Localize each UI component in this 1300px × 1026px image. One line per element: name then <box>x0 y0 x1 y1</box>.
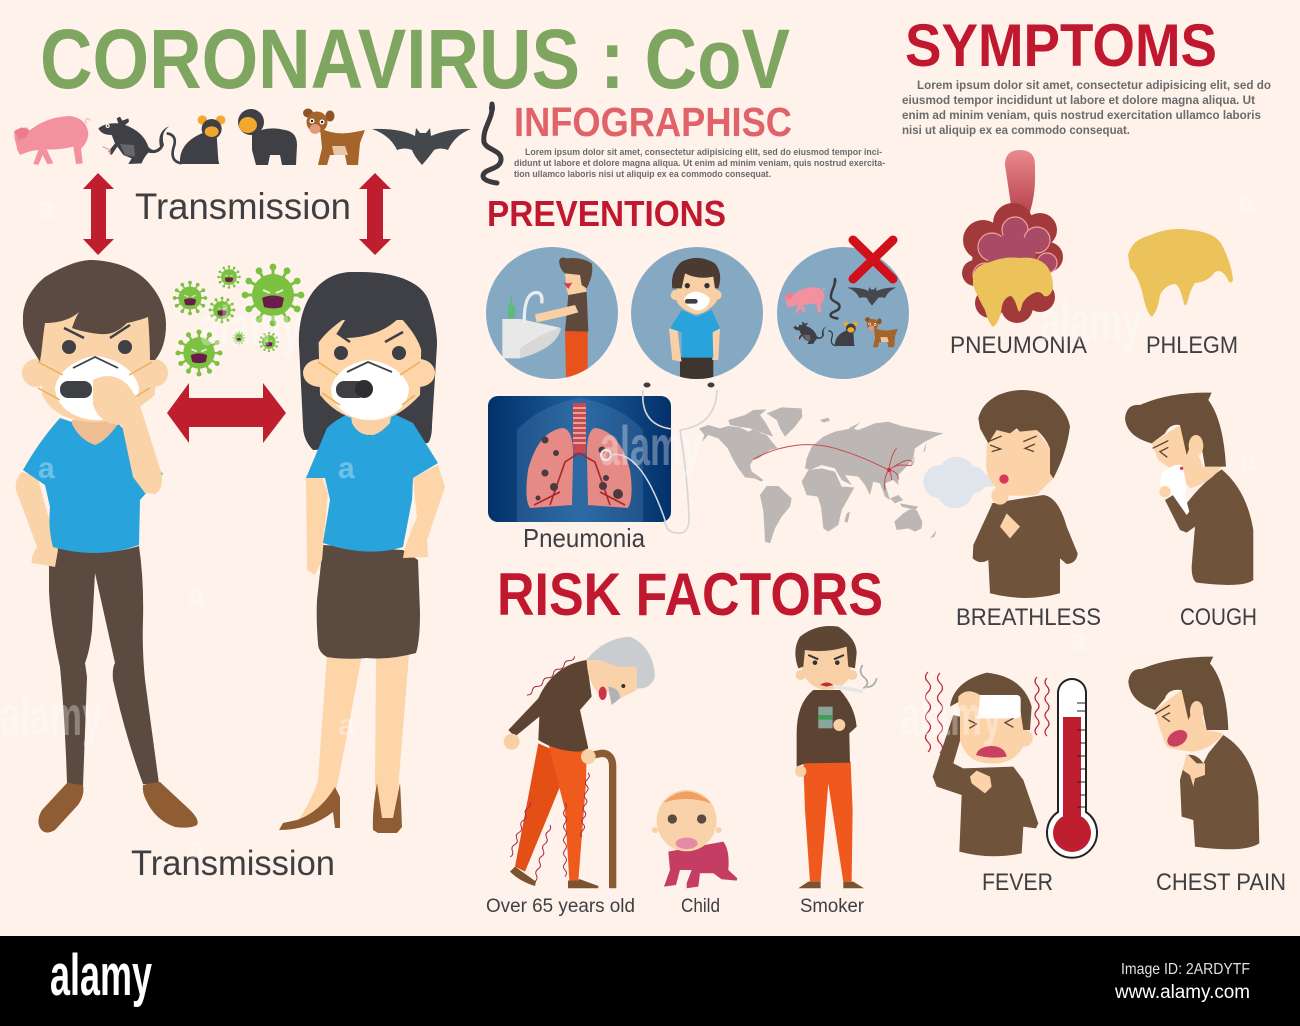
icon: thermometer <box>1047 679 1097 858</box>
head <box>670 290 677 300</box>
mucus <box>973 258 1053 327</box>
valve <box>336 381 366 398</box>
legs <box>515 743 560 872</box>
arrow: right vertical transmission <box>359 173 391 255</box>
head <box>652 827 658 833</box>
small monkey <box>828 322 858 346</box>
torso and raised arm <box>933 715 1038 856</box>
cane <box>593 753 613 888</box>
text: infographic description: tion ullamco laboris nisi ut aliquip ex ea commodo consequat. <box>514 169 771 180</box>
hands <box>795 766 806 777</box>
labels: breathless and cough <box>956 604 1257 631</box>
figure: elderly person <box>504 637 655 888</box>
animal row <box>14 103 501 183</box>
hands <box>504 734 520 750</box>
watermarks: a <box>38 452 55 485</box>
head <box>796 670 806 680</box>
small snake <box>830 278 840 318</box>
panel: avoid animals <box>777 240 909 379</box>
icon: rat <box>98 117 169 164</box>
eye <box>1153 441 1168 457</box>
text: symptoms description: eiusmod tempor incididunt ut labore et dolore magna aliqua. Ut <box>902 93 1255 107</box>
panel: hand washing <box>486 247 618 379</box>
inner lobes <box>973 217 1057 287</box>
icon: phlegm <box>1128 229 1233 317</box>
world map <box>699 407 943 543</box>
heels <box>279 783 402 833</box>
skirt <box>317 545 420 659</box>
headband <box>975 695 1021 718</box>
heading: risk factors: RISK FACTORS <box>497 561 883 628</box>
neck <box>350 408 392 435</box>
outer lobes <box>962 203 1063 323</box>
tissue <box>1160 465 1189 515</box>
watermarks: a <box>338 452 355 485</box>
hair <box>978 390 1070 478</box>
eyes <box>988 436 1037 452</box>
website: www.alamy.com <box>1114 982 1250 1003</box>
legs <box>297 655 362 822</box>
labels: breathless and cough: BREATHLESS <box>956 604 1101 631</box>
shirt <box>670 310 720 358</box>
stethoscope <box>601 382 717 533</box>
text: symptoms description <box>902 78 1271 137</box>
hair <box>1128 657 1228 730</box>
watermarks: alamy <box>0 684 102 747</box>
torso <box>565 292 588 332</box>
figure: chest pain <box>1128 657 1259 849</box>
title: CORONAVIRUS : CoV <box>40 12 790 106</box>
continents <box>699 407 943 543</box>
labels: fever and chest pain: CHEST PAIN <box>1156 869 1286 896</box>
icon: pig <box>14 116 90 165</box>
mask <box>55 356 139 420</box>
labels: risk factors <box>486 896 865 917</box>
watermarks: a <box>1240 444 1257 477</box>
labels: fever and chest pain <box>982 869 1286 896</box>
icon: snake <box>483 103 501 183</box>
text: infographic description: didunt ut labore et dolore magna aliqua. Ut enim ad minim veniam, quis nostrud exercita- <box>514 158 885 169</box>
text: symptoms description: nisi ut aliquip ex ea commodo consequat. <box>902 123 1130 137</box>
label: child: Child <box>681 896 720 917</box>
arms <box>669 328 720 362</box>
small pig <box>785 287 825 313</box>
icon: gorilla <box>238 109 297 165</box>
mouth <box>1164 727 1190 750</box>
watermarks: alamy <box>600 414 702 477</box>
text: infographic description: Lorem ipsum dolor sit amet, consectetur adipisicing elit, sed do eiusmod tempor inci- <box>525 147 882 158</box>
neck <box>72 420 118 445</box>
small bat <box>847 287 896 306</box>
pants <box>680 357 713 382</box>
airway <box>1005 150 1035 212</box>
labels: breathless and cough: COUGH <box>1180 604 1257 631</box>
torso <box>797 690 857 767</box>
label: pneumonia: Pneumonia <box>523 523 645 553</box>
faucet <box>524 293 542 325</box>
figure: cough <box>1125 393 1253 585</box>
watermarks: alamy <box>200 294 302 357</box>
legs <box>565 331 588 378</box>
footer logo: alamy <box>50 943 152 1008</box>
eyes <box>968 718 1013 728</box>
arm <box>535 305 578 322</box>
sink <box>502 319 520 358</box>
left arm <box>16 472 58 567</box>
route lines <box>753 445 912 490</box>
red cross <box>853 240 893 279</box>
text: symptoms description: Lorem ipsum dolor sit amet, consectetur adipisicing elit, sed do <box>917 78 1271 92</box>
label: smoker: Smoker <box>800 896 865 917</box>
heading: symptoms: SYMPTOMS <box>905 12 1217 79</box>
figure: breathless <box>923 390 1078 598</box>
heading: preventions: PREVENTIONS <box>487 193 726 234</box>
fringe <box>299 272 437 357</box>
icon: pneumonia alveoli <box>962 150 1063 327</box>
arrow: left vertical transmission <box>83 173 114 255</box>
raised arm and fist <box>93 376 162 494</box>
image id: Image ID: 2ARDYTF <box>1121 961 1250 978</box>
face <box>986 430 1058 496</box>
labels: pneumonia and phlegm: PHLEGM <box>1146 332 1238 359</box>
watermarks: a <box>188 579 205 612</box>
hair <box>23 260 166 362</box>
eye <box>1155 705 1170 722</box>
shirt <box>23 418 163 553</box>
hands <box>958 691 980 717</box>
text: symptoms description: enim ad minim veniam, quis nostrud exercitation ullamco laboris <box>902 108 1261 122</box>
shoes <box>38 783 83 833</box>
torso and arms <box>973 495 1078 598</box>
figure: woman with mask <box>279 272 445 833</box>
torso <box>1165 469 1253 585</box>
mouth <box>976 746 1007 758</box>
shoes <box>798 882 864 888</box>
watermarks <box>0 186 1257 865</box>
text: infographic description <box>514 147 885 180</box>
arms <box>306 465 445 575</box>
mouth <box>999 474 1009 484</box>
watermarks: a <box>188 832 205 865</box>
pain waves <box>510 656 589 882</box>
eyes <box>334 346 348 360</box>
valve <box>60 381 92 398</box>
torso <box>1180 735 1259 849</box>
figure: fever <box>926 672 1049 856</box>
icon: deer <box>303 108 365 165</box>
smoke <box>861 665 877 688</box>
legs <box>803 762 853 882</box>
heat waves <box>926 672 1049 753</box>
arrow: horizontal between people <box>167 383 286 443</box>
labels: pneumonia and phlegm: PNEUMONIA <box>950 332 1087 359</box>
watermarks: a <box>1070 624 1087 657</box>
face <box>1152 425 1222 488</box>
panel: wear a mask <box>631 247 763 382</box>
lungs <box>526 428 632 508</box>
hands <box>991 487 1009 505</box>
head <box>587 655 637 705</box>
viruses <box>173 264 304 377</box>
small rat <box>793 322 827 344</box>
icon: monkey <box>167 115 225 164</box>
cigarette <box>833 684 863 693</box>
pack <box>818 707 833 728</box>
head <box>565 273 587 295</box>
torso <box>508 660 592 752</box>
face <box>960 697 1033 763</box>
body silhouette <box>517 398 643 522</box>
body <box>664 842 737 888</box>
watermarks: alamy <box>1040 289 1142 352</box>
hair <box>950 673 1032 730</box>
panel: pneumonia lungs <box>488 396 671 522</box>
figure: smoker <box>795 626 877 888</box>
hands <box>1183 753 1205 787</box>
mask <box>331 360 409 420</box>
hair back <box>299 272 437 450</box>
pants <box>49 546 159 786</box>
label: over 65: Over 65 years old <box>486 896 635 917</box>
heading: transmission bottom: Transmission <box>131 844 335 883</box>
footer bar <box>0 936 1300 1026</box>
figure: man with mask <box>16 260 198 833</box>
heading: transmission top: Transmission <box>135 186 351 227</box>
watermarks: a <box>38 192 55 225</box>
mask <box>684 292 710 311</box>
labels: fever and chest pain: FEVER <box>982 869 1053 896</box>
labels: pneumonia and phlegm <box>950 332 1238 359</box>
shoes <box>510 867 536 886</box>
breath cloud <box>923 457 993 508</box>
heading: infographics: INFOGRAPHISC <box>514 99 792 145</box>
figure: baby <box>652 790 737 888</box>
watermarks: a <box>1238 186 1255 219</box>
soap <box>508 305 515 318</box>
bronchi <box>534 453 625 505</box>
trachea <box>573 403 586 453</box>
eyes <box>62 340 76 354</box>
face <box>40 310 155 422</box>
face <box>1155 690 1223 752</box>
icon: bat <box>372 128 471 165</box>
watermarks: a <box>338 709 355 742</box>
watermarks: alamy <box>900 684 1002 747</box>
small deer <box>865 317 898 347</box>
shirt <box>306 413 438 552</box>
lung lesions <box>536 436 623 500</box>
face <box>318 320 422 421</box>
hair <box>1125 393 1226 467</box>
